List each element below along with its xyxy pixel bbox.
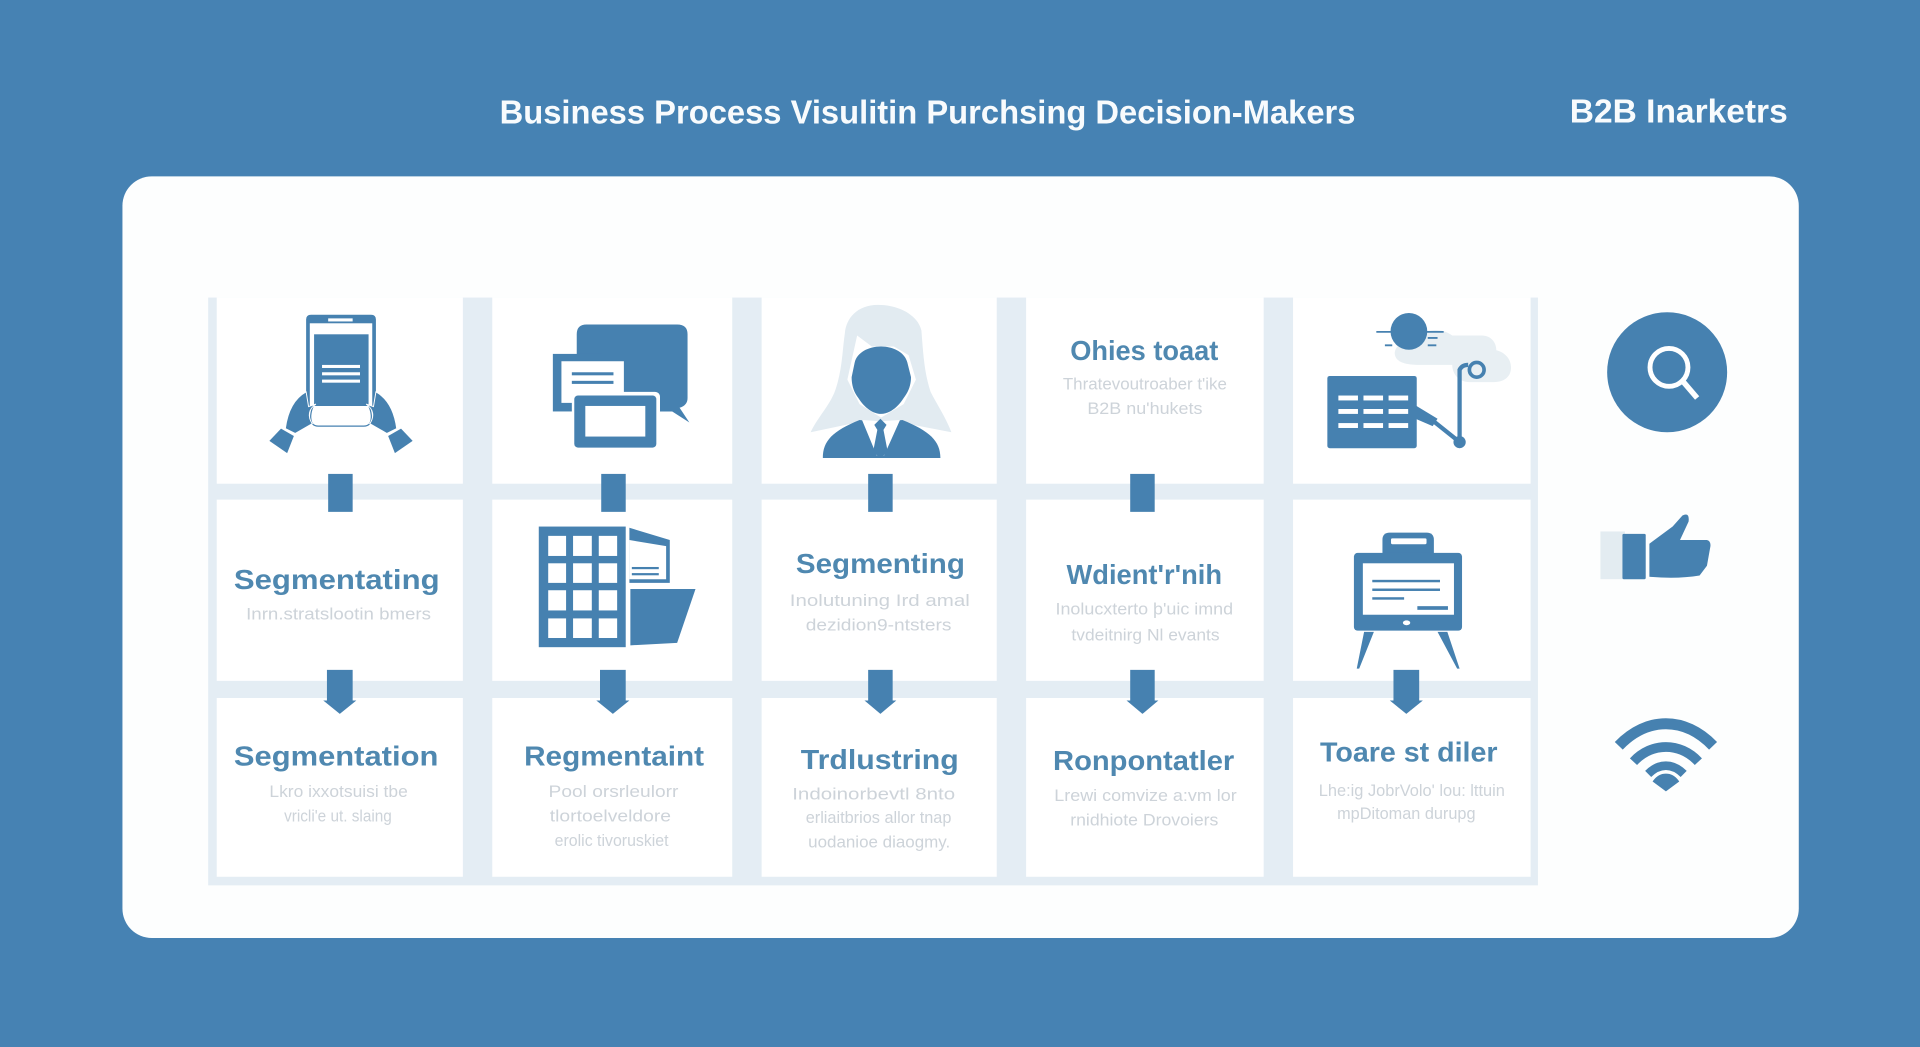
- text block: Ronpontatler: rnidhiote Drovoiers: [1070, 810, 1218, 829]
- text block: Regmentaint: [524, 740, 705, 850]
- text block: Regmentaint: erolic tivoruskiet: [555, 831, 669, 850]
- icon: wifi signal: [1619, 724, 1713, 790]
- icon: calendar grid and folder: [539, 527, 696, 647]
- text block: Toare st diler: [1319, 737, 1505, 823]
- text block: Segmenting: Segmenting: [796, 548, 965, 579]
- icon: table linked to cloud and sun: [1327, 313, 1511, 448]
- text block: Segmentation: [234, 740, 438, 826]
- text block: Trdlustring: erliaitbrios allor tnap: [806, 808, 951, 827]
- text block: Toare st diler: Lhe:ig JobrVolo' lou: lttuin: [1319, 781, 1505, 800]
- icon: woman and businessman silhouettes: [811, 305, 951, 458]
- text block: Trdlustring: [792, 744, 959, 851]
- text block: Toare st diler: mpDitoman durupg: [1337, 804, 1476, 823]
- heading block: Ohies toaat: Ohies toaat: [1070, 335, 1219, 366]
- text block: Segmentating: [234, 564, 440, 624]
- text block: Regmentaint: tlortoelveldore: [550, 807, 671, 826]
- text block: Toare st diler: Toare st diler: [1320, 737, 1498, 768]
- panel: main white card: [122, 176, 1799, 938]
- text block: Segmenting: Inolutuning Ird amal: [790, 591, 970, 610]
- connectors: row one to row two: [328, 474, 1155, 512]
- text block: Ronpontatler: Ronpontatler: [1053, 745, 1234, 776]
- text block: Segmentation: Lkro ixxotsuisi tbe: [269, 782, 408, 801]
- heading block: Ohies toaat: B2B nu'hukets: [1087, 399, 1202, 418]
- text block: Regmentaint: Regmentaint: [524, 740, 705, 771]
- text block: Segmentation: Segmentation: [234, 740, 438, 771]
- icon: hands holding tablet: [269, 315, 413, 453]
- text block: Wdient'r'nih: Wdient'r'nih: [1067, 559, 1222, 590]
- text block: Ronpontatler: Lrewi comvize a:vm lor: [1054, 786, 1237, 805]
- heading block: Ohies toaat: [1063, 335, 1227, 418]
- text block: Trdlustring: uodanioe diaogmy.: [808, 832, 950, 851]
- arrows: row two to row three: [323, 670, 1423, 714]
- text block: Segmentation: vricli'e ut. slaing: [284, 807, 392, 826]
- text block: Segmentating: Inrn.stratslootin bmers: [246, 605, 431, 624]
- text block: Wdient'r'nih: Inolucxterto þ'uic imnd: [1056, 600, 1233, 619]
- text block: Regmentaint: Pool orsrleulorr: [549, 782, 679, 801]
- text block: Ronpontatler: [1053, 745, 1237, 829]
- heading block: Ohies toaat: Thratevoutroaber t'ike: [1063, 374, 1227, 393]
- icon: magnifier in circle: [1607, 312, 1727, 432]
- icon: presentation easel: [1354, 533, 1462, 669]
- text block: Segmenting: [790, 548, 970, 635]
- subtitle: B2B marketers: B2B Inarketrs: [1570, 93, 1788, 130]
- process grid: [208, 298, 1538, 885]
- text block: Trdlustring: Indoinorbevtl 8nto: [792, 785, 955, 804]
- text block: Segmenting: dezidion9-ntsters: [806, 616, 951, 635]
- icon: thumbs up: [1600, 515, 1711, 579]
- text block: Wdient'r'nih: [1056, 559, 1233, 644]
- text block: Trdlustring: Trdlustring: [801, 744, 959, 775]
- text block: Wdient'r'nih: tvdeitnirg Nl evants: [1071, 625, 1220, 644]
- title: Business Process Visulitin Purchsing Decision-Makers: [500, 95, 1356, 132]
- icon: chat bubble and documents: [553, 325, 689, 451]
- text block: Segmentating: Segmentating: [234, 564, 440, 595]
